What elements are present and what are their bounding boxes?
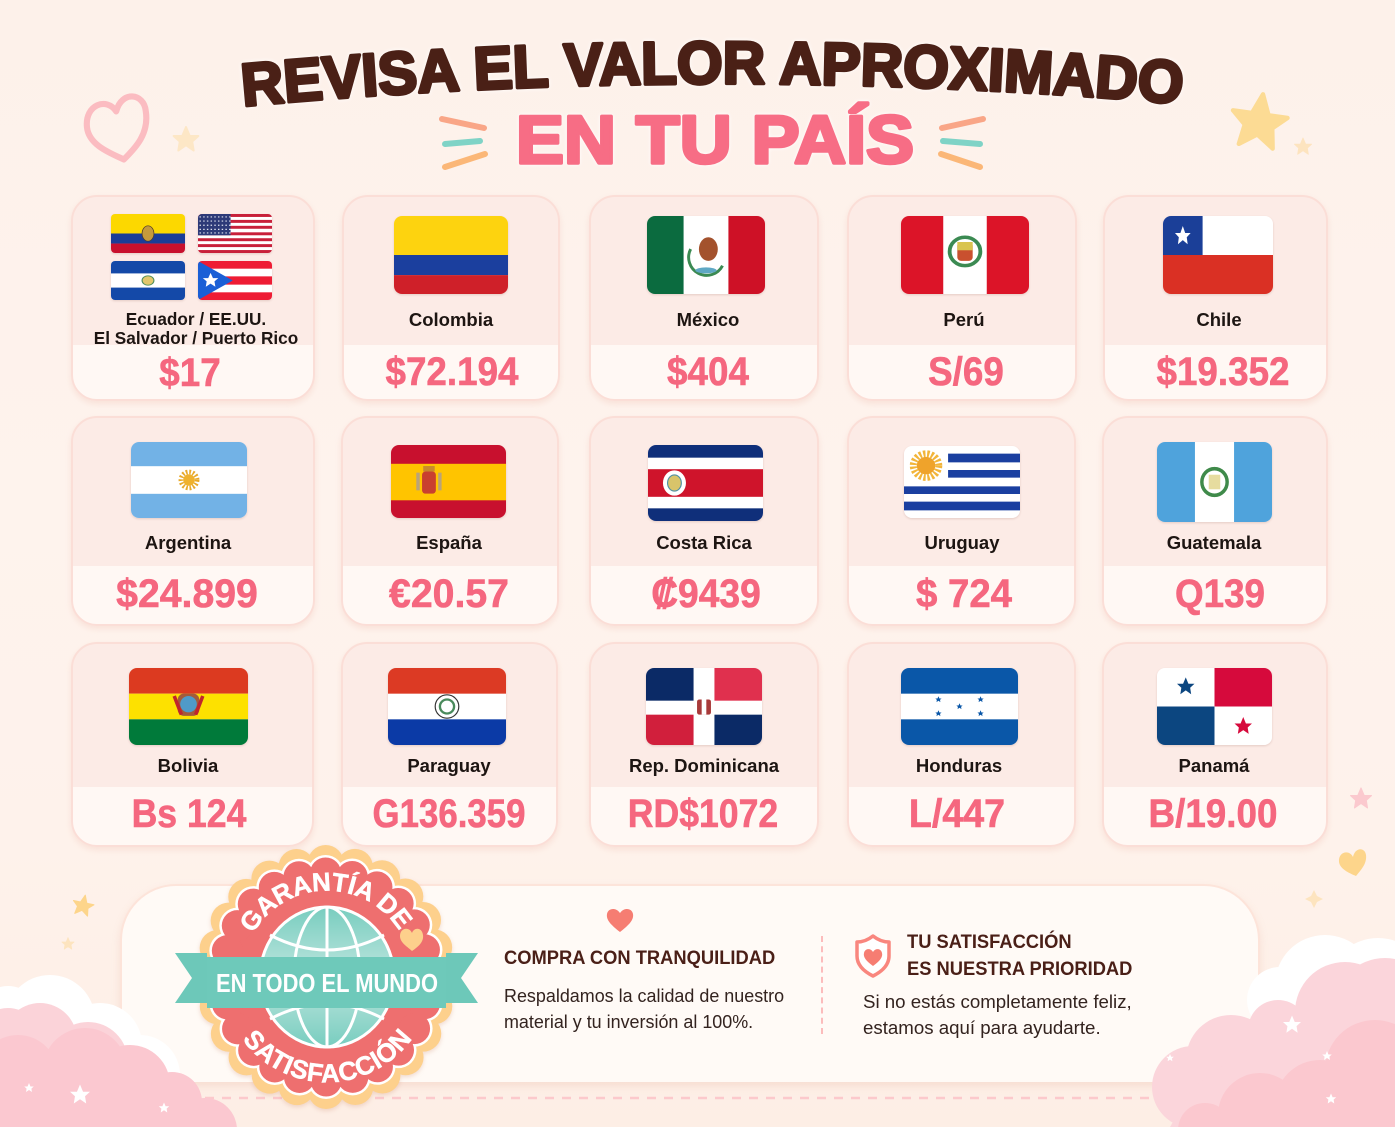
- flag: USA: [198, 214, 272, 253]
- icon: outline heart top left: [84, 95, 151, 163]
- price: B/19.00: [1149, 792, 1277, 836]
- icon: small star left: [62, 938, 74, 949]
- card: México: [589, 195, 819, 401]
- flag: Chile: [1163, 216, 1273, 294]
- icon: small star right: [1294, 138, 1312, 154]
- icon: sparkle: [1305, 890, 1323, 908]
- title line 2: EN TU PAÍS: [516, 102, 914, 178]
- heading: compra con tranquilidad: COMPRA CON TRANQUILIDAD: [504, 947, 775, 969]
- card: Rep. Dominicana: [589, 642, 819, 847]
- country name: Guatemala: [1167, 532, 1261, 553]
- country name: Perú: [943, 309, 985, 330]
- ribbon: [175, 953, 478, 1008]
- card: Panamá: [1102, 642, 1328, 847]
- text: si no estás: estamos aquí para ayudarte.: [863, 1017, 1101, 1038]
- country name: México: [677, 309, 739, 330]
- card: España: [341, 416, 559, 626]
- vertical dashed divider: [821, 936, 823, 1034]
- country name: Chile: [1196, 309, 1242, 330]
- price: Bs 124: [132, 792, 246, 836]
- card: Chile: [1103, 195, 1328, 401]
- flag: Honduras: [901, 668, 1018, 745]
- icon: heart: [606, 909, 634, 932]
- flag: Ecuador: [111, 214, 185, 253]
- flag: Guatemala: [1157, 442, 1272, 522]
- globe: [260, 907, 394, 1047]
- seal red scalloped body: [224, 873, 428, 1081]
- icon: pink star: [1351, 788, 1371, 808]
- price: G136.359: [373, 792, 525, 836]
- country name: Panamá: [1179, 755, 1249, 776]
- seal orange scalloped edge: [214, 863, 438, 1091]
- icon: yellow star left: [71, 893, 96, 917]
- country name: Rep. Dominicana: [629, 755, 779, 776]
- heading: tu satisfacción: ES NUESTRA PRIORIDAD: [907, 958, 1132, 980]
- seal text top: GARANTÍA DE: [241, 872, 414, 930]
- card: Guatemala: [1102, 416, 1328, 626]
- card: Costa Rica: [589, 416, 819, 626]
- country name: El Salvador / Puerto Rico: [94, 328, 298, 348]
- flag: Colombia: [394, 216, 508, 294]
- price: $404: [667, 350, 749, 394]
- price: $19.352: [1156, 350, 1290, 394]
- price: $72.194: [385, 350, 519, 394]
- price: $17: [159, 351, 221, 395]
- country name: Argentina: [145, 532, 231, 553]
- price: S/69: [928, 350, 1004, 394]
- price: $ 724: [916, 572, 1012, 616]
- flag: Costa Rica: [648, 445, 763, 521]
- price: L/447: [909, 792, 1005, 836]
- country name: Ecuador / EE.UU.: [126, 309, 266, 329]
- seal text bottom: SATISFACCIÓN: [244, 1028, 412, 1083]
- card: Honduras: [847, 642, 1076, 847]
- country name: Bolivia: [158, 755, 218, 776]
- heading: tu satisfacción: TU SATISFACCIÓN: [907, 931, 1072, 953]
- text: respaldamos: [504, 985, 784, 1032]
- card: Colombia: [342, 195, 560, 401]
- text: si no estás: Si no estás completamente feliz,: [863, 991, 1132, 1012]
- right accent lines: [941, 119, 983, 167]
- flag: Puerto Rico: [198, 261, 272, 300]
- icon: yellow heart right: [1339, 849, 1366, 876]
- cloud: bottom right: [1152, 935, 1395, 1127]
- ribbon text: EN TODO EL MUNDO: [216, 968, 438, 998]
- card: Bolivia: [71, 642, 314, 847]
- icon: pale star left: [174, 127, 198, 151]
- price: €20.57: [389, 572, 509, 616]
- title line 1: REVISA EL VALOR APROXIMADO: [242, 40, 1184, 108]
- price: ₡9439: [651, 572, 761, 616]
- card: Argentina: [71, 416, 315, 626]
- card: Perú: [847, 195, 1077, 401]
- country name: Honduras: [916, 755, 1002, 776]
- text: respaldamos: material y tu inversión al 100%.: [504, 1011, 753, 1032]
- flag: El Salvador: [111, 261, 185, 300]
- card: Uruguay: [847, 416, 1076, 626]
- panel: guarantee: [120, 884, 1260, 1082]
- flag: México: [647, 216, 765, 294]
- card: Paraguay: [341, 642, 558, 847]
- price: $24.899: [116, 572, 258, 616]
- country name: España: [416, 532, 482, 553]
- price: RD$1072: [628, 792, 778, 836]
- card: Ecuador / EE.UU. / El Salvador / Puerto Rico: [71, 195, 315, 401]
- icon: shield: [855, 934, 891, 978]
- flag: Bolivia: [129, 668, 248, 745]
- flag: Argentina: [131, 442, 247, 518]
- country name: Paraguay: [407, 755, 491, 776]
- country name: Colombia: [409, 309, 493, 330]
- icon: big yellow star right: [1228, 90, 1290, 150]
- left accent lines: [442, 119, 485, 167]
- flag: Paraguay: [388, 668, 506, 745]
- country name: Costa Rica: [656, 532, 752, 553]
- country name: Uruguay: [924, 532, 1000, 553]
- flag: Uruguay: [904, 446, 1020, 518]
- seal white scalloped ring: [224, 873, 428, 1081]
- seal heart: [400, 929, 423, 951]
- flag: Rep. Dominicana: [646, 668, 762, 745]
- flag: Panamá: [1157, 668, 1272, 745]
- text: si no estás: [863, 991, 1132, 1038]
- cloud: bottom left: [0, 975, 237, 1127]
- country name: [94, 309, 298, 348]
- price: Q139: [1175, 572, 1265, 616]
- heading: tu satisfacción: [907, 930, 1132, 980]
- text: respaldamos: Respaldamos la calidad de nuestro: [504, 985, 784, 1006]
- flag: Perú: [901, 216, 1029, 294]
- flag: España: [391, 445, 506, 518]
